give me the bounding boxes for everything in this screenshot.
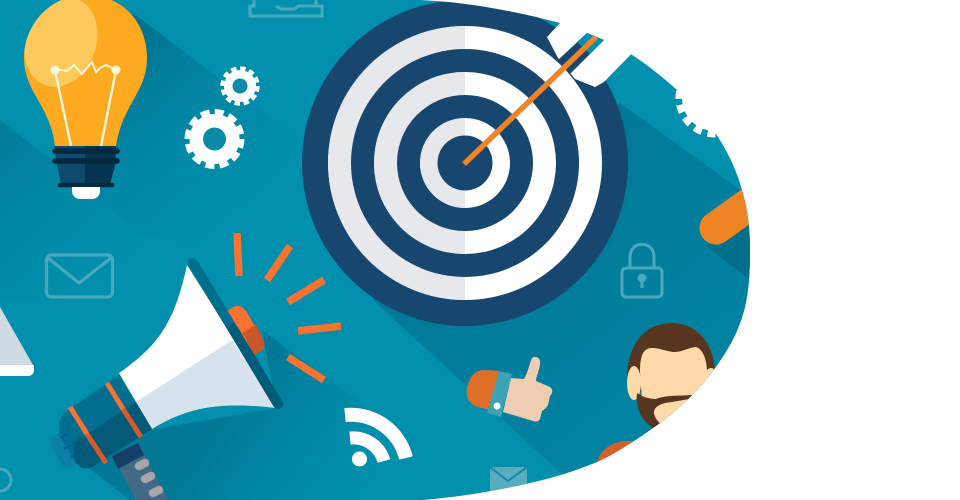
icon: mail outline: [46, 255, 112, 297]
body: [59, 375, 152, 468]
handle grips: [139, 463, 159, 493]
handle: [119, 443, 168, 500]
face: [640, 347, 707, 425]
arrow feathers: [547, 10, 640, 87]
target: [302, 0, 628, 326]
arrow shaft: [464, 37, 596, 164]
beard: [637, 393, 695, 430]
icon: small gear: [222, 68, 258, 104]
illustration: [0, 0, 750, 500]
lightbulb: [12, 0, 147, 199]
button: [227, 306, 264, 355]
megaphone: [50, 263, 278, 500]
rear cap lines: [60, 434, 77, 458]
icon: laptop outline top: [250, 0, 322, 16]
rim: [193, 263, 278, 404]
hair: [627, 323, 715, 392]
hand: [503, 357, 552, 422]
arrow: [464, 10, 640, 164]
laptop fragment: [0, 307, 34, 376]
bulb highlight: [24, 0, 98, 87]
icon: thumbs up: [467, 357, 552, 422]
icon: ring at left edge: [0, 469, 11, 491]
long shadows: [0, 13, 750, 500]
wrist band: [487, 371, 512, 417]
man avatar: [597, 323, 718, 470]
icon: small mail filled: [490, 467, 527, 493]
pill shadow: [705, 222, 750, 280]
bulb glass: [24, 0, 147, 146]
orange pill: [705, 186, 775, 280]
ears: [627, 366, 641, 400]
cone: [119, 265, 277, 429]
icon: padlock outline: [622, 244, 662, 297]
icon: wifi: [345, 415, 406, 466]
shirt: [642, 426, 656, 436]
megaphone sound rays: [237, 233, 341, 380]
shoulder: [597, 441, 634, 462]
bulb base: [54, 146, 116, 184]
pill body: [716, 186, 775, 228]
white gear cut-out: [679, 62, 751, 134]
rear cap: [50, 434, 76, 468]
body stripes: [70, 383, 123, 434]
sleeve: [467, 370, 499, 410]
icon: large gear: [188, 112, 242, 166]
filament: [50, 62, 120, 146]
teal blob background: [0, 0, 750, 500]
